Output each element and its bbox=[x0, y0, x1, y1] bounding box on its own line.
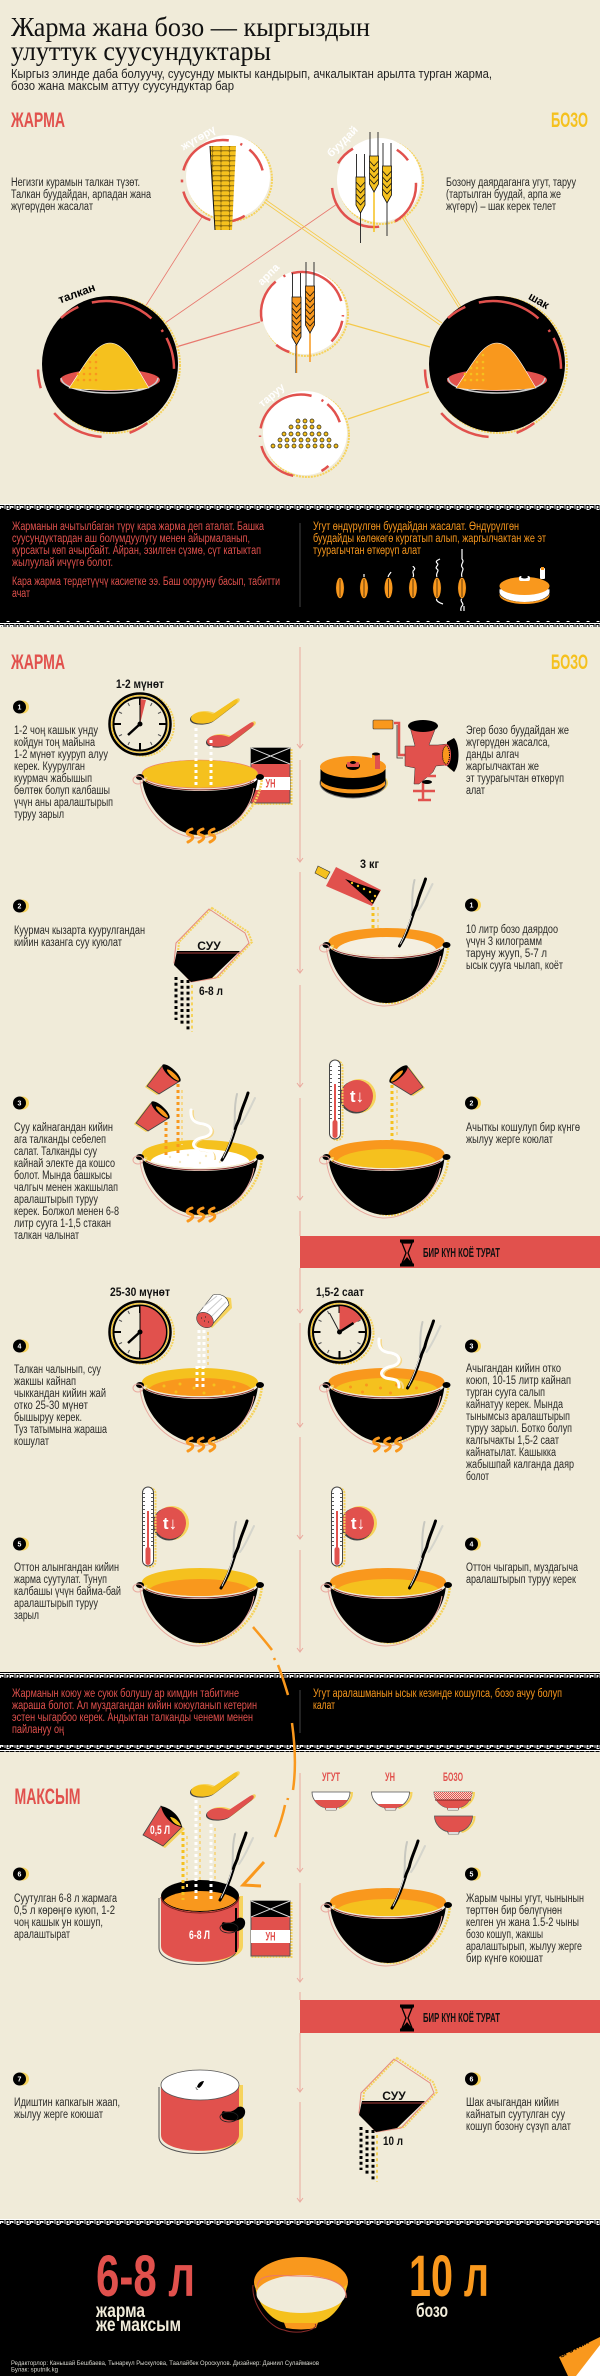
steam 2 bbox=[379, 1339, 403, 1388]
text: step 1: үчүн аны аралаштырып bbox=[14, 797, 113, 809]
icon: yeast bowl half bbox=[312, 1792, 352, 1811]
circle: barley bbox=[253, 261, 351, 373]
text: bozo grinding: жаргылчактан же bbox=[466, 761, 539, 773]
step badge 1 bbox=[13, 700, 29, 714]
icon: serving bowl bbox=[253, 2257, 348, 2332]
icon: cauldron bozo mixing bbox=[321, 1841, 452, 1966]
text: kara zharma bbox=[12, 521, 280, 600]
step badge bozo 3 bbox=[465, 1340, 481, 1352]
text: step 3: болот. Мында башкысы bbox=[14, 1170, 112, 1182]
text: step 1: 1-2 мүнөт кууруп алуу bbox=[14, 749, 108, 761]
text: bozo step 3: турган сууга салып bbox=[466, 1387, 545, 1399]
icon: meat grinder bbox=[373, 720, 458, 800]
text: kara zharma: жылуулай ичүүгө болот. bbox=[12, 557, 113, 569]
text: consistency note: пайлануу оң bbox=[12, 1724, 65, 1736]
icon: flour box maksym: УН bbox=[266, 1930, 276, 1944]
icon: tube of millet bbox=[315, 866, 381, 947]
text: бозо ingredients: жүгөрү) – шак керек телет bbox=[446, 201, 557, 213]
icon: thermometer bozo: t↓ bbox=[351, 1514, 365, 1533]
icon: flour box bbox=[251, 748, 292, 804]
text: step 1: бөлтөк болуп калбашы bbox=[14, 785, 110, 797]
text: step 3 bbox=[14, 1122, 119, 1242]
text: bozo step 5: бир күнгө коюшат bbox=[466, 1953, 544, 1965]
text: step 5: аралаштырып туруу bbox=[14, 1598, 98, 1610]
icon: thermometer bozo bbox=[332, 1487, 377, 1567]
text: step 3: Суу кайнагандан кийин bbox=[14, 1122, 113, 1134]
label: shak: шак bbox=[526, 291, 551, 312]
text: bozo step 5 bbox=[466, 1893, 584, 1965]
text: bozo step 4 bbox=[466, 1562, 578, 1586]
icon: flour box maksym bbox=[251, 1901, 292, 1957]
text: step 1: керек. Куурулган bbox=[14, 761, 85, 773]
center timeline: arrows bbox=[297, 647, 303, 2202]
step badge 7: 7 bbox=[18, 2076, 22, 2084]
subtitle: Кыргыз элинде даба болуучу, суусунду мыкты кандырып, ачкалыктан арылта турган жарма, bbox=[11, 66, 492, 81]
text: bozo step 2: жылуу жерге коюлат bbox=[466, 1134, 554, 1146]
heading: maksym: МАКСЫМ bbox=[14, 1784, 80, 1809]
text: bozo step 3: кайнатылат. Кашыкка bbox=[466, 1447, 556, 1459]
circle: wheat bbox=[316, 124, 432, 243]
text: жарма ingredients: жүгөрүдөн жасалат bbox=[11, 201, 94, 213]
falling ingredient dots bbox=[183, 1800, 215, 1900]
step badge bozo 5 bbox=[465, 1868, 481, 1880]
icon: thermometer zharma bbox=[142, 1487, 189, 1567]
text: bozo grinding: эт туурагычтан өткөрүп bbox=[466, 773, 564, 785]
text: kara zharma: Жарманын ачытылбаган түрү кара жарма деп аталат. Башка bbox=[12, 521, 264, 533]
icon: cauldron step 1 bbox=[133, 760, 264, 842]
text: step 1 bbox=[14, 725, 113, 821]
text: bozo step 1: 10 литр бозо даярдоо bbox=[466, 924, 558, 936]
text: step 4 bbox=[14, 1364, 107, 1448]
icon: clock 1-2 minutes bbox=[110, 694, 174, 756]
step badge bozo 3: 3 bbox=[470, 1344, 474, 1350]
text: step 7: жылуу жерге коюшат bbox=[14, 2109, 104, 2121]
text: bozo step 3: туруу зарыл. Ботко болуп bbox=[466, 1423, 572, 1435]
text: consistency note: эстен чыгарбоо керек. Андыктан талканды ченеми менен bbox=[12, 1712, 253, 1724]
black band: notes bbox=[0, 1672, 600, 1752]
icon: yellow spoon bbox=[190, 698, 240, 725]
logo: sputnik bbox=[558, 2337, 600, 2376]
icon: hourglass bbox=[400, 1241, 414, 1265]
caption: zharma or maksym bbox=[95, 2301, 181, 2336]
text: bozo step 3: коюп, 10-15 литр кайнап bbox=[466, 1375, 571, 1387]
credits bbox=[11, 2359, 319, 2374]
step badge 5 bbox=[13, 1538, 29, 1550]
text: bozo step 1: таруну жууп, 5-7 л bbox=[466, 948, 547, 960]
heading: жарма: ЖАРМА bbox=[10, 109, 65, 132]
text: step 4: жакшы кайнап bbox=[14, 1376, 76, 1388]
icon: salt shaker bbox=[194, 1294, 232, 1388]
text: bozo grinding bbox=[466, 725, 569, 797]
icon: jug pouring water: СУУ bbox=[382, 2089, 406, 2103]
text: bozo step 1 bbox=[466, 924, 564, 972]
icon: red spoon bbox=[206, 721, 256, 748]
red banner: one day 2: БИР КҮН КОЁ ТУРАТ bbox=[423, 2010, 500, 2025]
black band: facts bbox=[0, 504, 600, 627]
icon: maksym pot bbox=[159, 1833, 253, 1964]
icon: cauldron cooling bozo bbox=[321, 1521, 452, 1646]
text: bozo step 2 bbox=[466, 1122, 580, 1146]
text: bozo grinding: данды алгач bbox=[466, 749, 519, 761]
credits: Редакторлор: Канышай Бешбаева, Тынаркүл Рыскулова, Таалайбек Ороскулов. Дизайнер: Даниил Сулайманов bbox=[11, 2359, 319, 2367]
icon: millstone white bbox=[500, 567, 550, 604]
text: step 5: калбашы үчүн байма-бай bbox=[14, 1586, 121, 1598]
icon: hourglass 2 bbox=[400, 2006, 414, 2030]
text: bozo step 3 bbox=[466, 1363, 574, 1483]
circle: millet bbox=[254, 381, 349, 483]
step badge 3: 3 bbox=[18, 1100, 22, 1108]
icon: cup 0.5 l: 0,5 Л bbox=[150, 1823, 170, 1837]
text: ugut bbox=[313, 521, 547, 557]
text: bozo step 6 bbox=[466, 2097, 572, 2133]
text: step 5: жарма суутулат. Тунуп bbox=[14, 1574, 107, 1586]
icon: cauldron cooling zharma bbox=[133, 1521, 264, 1646]
text: step 4: кошулат bbox=[14, 1436, 50, 1448]
label: pot volume: 6-8 Л bbox=[189, 1928, 210, 1942]
text: kara zharma: Кара жарма тердетүүчү касиетке ээ. Баш оорууну басып, табитти bbox=[12, 576, 280, 588]
icon: sprouting grains bbox=[336, 549, 466, 611]
text: step 3: чалгыч менен жакшылап bbox=[14, 1182, 118, 1194]
step badge bozo 4 bbox=[465, 1538, 481, 1550]
icon: flour box: УН bbox=[266, 776, 276, 790]
icon: water jug bbox=[174, 908, 252, 1032]
text: step 1: 1-2 чоң кашык унду bbox=[14, 725, 98, 737]
label: 1-2 minutes: 1-2 мүнөт bbox=[116, 677, 164, 691]
text: yeast note: калат bbox=[313, 1700, 336, 1712]
label: wheat: буудай bbox=[325, 124, 361, 160]
text: step 2: кийин казанга суу куюлат bbox=[14, 937, 123, 949]
result: 10 l: 10 л bbox=[409, 2244, 489, 2309]
text: bozo step 3: тынымсыз аралаштырып bbox=[466, 1411, 570, 1423]
circle: corn bbox=[173, 123, 273, 231]
label: barley: арпа bbox=[256, 261, 283, 288]
circle: shak grain bbox=[397, 273, 589, 465]
red banner: one day: БИР КҮН КОЁ ТУРАТ bbox=[423, 1245, 500, 1260]
icon: covered pot bbox=[159, 2070, 245, 2154]
text: step 3: литр сууга 1-1,5 стакан bbox=[14, 1218, 111, 1230]
icon: yellow spoon maksym bbox=[190, 1771, 240, 1798]
text: consistency note bbox=[12, 1688, 257, 1736]
text: жарма ingredients: Талкан буудайдан, арпадан жана bbox=[11, 189, 151, 201]
label: talkan: талкан bbox=[57, 282, 97, 306]
text: bozo grinding: жүгөрүдөн жасалса, bbox=[466, 737, 550, 749]
text: ugut: туурагычтан өткөрүп алат bbox=[313, 545, 422, 557]
circle: talkan flour bbox=[10, 273, 202, 465]
icon: cauldron with millet water bbox=[320, 879, 450, 1006]
ratio labels: УН bbox=[385, 1772, 395, 1784]
icon: clock 25-30 minutes bbox=[110, 1302, 174, 1364]
step badge bozo 4: 4 bbox=[470, 1542, 474, 1548]
step badge 1: 1 bbox=[18, 704, 22, 712]
text: бозо ingredients bbox=[446, 177, 576, 213]
subtitle: бозо жана максым аттуу суусундуктар бар bbox=[11, 78, 234, 93]
label: 3 kg: 3 кг bbox=[360, 857, 379, 871]
icon: cup 0.5 l bbox=[143, 1806, 185, 1848]
text: consistency note: жараша болот. Ал муздагандан кийин коюуланып кетерин bbox=[12, 1700, 257, 1712]
icon: cauldron fermenting bbox=[320, 1140, 450, 1218]
step badge bozo 6: 6 bbox=[470, 2076, 474, 2084]
step badge 4 bbox=[13, 1340, 29, 1352]
title: улуттук суусундуктары bbox=[11, 36, 271, 66]
step badge bozo 2: 2 bbox=[470, 1100, 474, 1108]
icon: thermometer and temperature badge: t↓ bbox=[350, 1087, 364, 1106]
text: bozo grinding: Эгер бозо буудайдан же bbox=[466, 725, 569, 737]
red banner: one day 2 bbox=[300, 2000, 600, 2033]
step badge 4: 4 bbox=[18, 1344, 22, 1350]
step badge 5: 5 bbox=[18, 1542, 22, 1548]
title bbox=[11, 12, 370, 66]
icon: red spoon maksym bbox=[206, 1794, 256, 1821]
text: step 4: бышыруу керек. bbox=[14, 1412, 82, 1424]
ratio labels: БОЗО bbox=[443, 1772, 463, 1784]
text: bozo step 6: кошуп бозону сүзүп алат bbox=[466, 2121, 572, 2133]
text: step 5: Оттон алынгандан кийин bbox=[14, 1562, 119, 1574]
credits: Булак: sputnik.kg bbox=[11, 2366, 58, 2374]
step badge 6: 6 bbox=[18, 1872, 22, 1878]
text: step 3: талкан чалынат bbox=[14, 1230, 80, 1242]
text: bozo step 6: кайнатып суутулган суу bbox=[466, 2109, 565, 2121]
step badge bozo 2 bbox=[465, 1096, 481, 1110]
text: bozo step 1: үчүн 3 килограмм bbox=[466, 936, 542, 948]
text: step 6: чоң кашык ун кошуп, bbox=[14, 1917, 103, 1929]
text: step 4: Туз татымына жараша bbox=[14, 1424, 107, 1436]
text: kara zharma: ачат bbox=[12, 588, 31, 600]
label: millet: таруу bbox=[257, 381, 288, 410]
icon: thermometer zharma: t↓ bbox=[163, 1514, 177, 1533]
dashed arrow to maksym pot bbox=[243, 1627, 295, 1886]
step badge 6 bbox=[13, 1868, 29, 1880]
text: step 5: зарыл bbox=[14, 1610, 39, 1622]
title: Жарма жана бозо — кыргыздын bbox=[11, 12, 370, 42]
label: 6-8 l: 6-8 л bbox=[199, 984, 223, 998]
caption: zharma or maksym: же максым bbox=[95, 2315, 181, 2336]
icon: millstone bbox=[320, 752, 388, 798]
text: step 1: койдун тоң майына bbox=[14, 737, 95, 749]
text: жарма ingredients bbox=[11, 177, 151, 213]
text: step 6: Суутулган 6-8 л жармага bbox=[14, 1893, 117, 1905]
falling flour dots bbox=[196, 728, 211, 785]
step badge bozo 1: 1 bbox=[470, 902, 474, 910]
step badge bozo 5: 5 bbox=[470, 1872, 474, 1878]
text: step 4: чыккандан кийин жай bbox=[14, 1388, 106, 1400]
caption: zharma or maksym: жарма bbox=[95, 2301, 145, 2322]
text: bozo step 3: болот bbox=[466, 1471, 490, 1483]
label: corn: жүгөрү bbox=[178, 123, 219, 154]
text: step 6: 0,5 л көрөңгө куюп, 1-2 bbox=[14, 1905, 115, 1917]
text: step 3: кайнай электе да кошсо bbox=[14, 1158, 115, 1170]
text: step 3: салат. Талканды суу bbox=[14, 1146, 97, 1158]
text: bozo step 3: калгычакты 1,5-2 саат bbox=[466, 1435, 560, 1447]
text: bozo step 5: төрттөн бир бөлүгүнөн bbox=[466, 1905, 562, 1917]
icon: red cups pouring flour bbox=[134, 1062, 183, 1155]
text: step 5 bbox=[14, 1562, 121, 1622]
step badge 2: 2 bbox=[18, 904, 22, 910]
ratio labels bbox=[322, 1772, 463, 1784]
text: step 6 bbox=[14, 1893, 117, 1941]
icon: clock 1.5-2 hours bbox=[309, 1302, 374, 1364]
steam bbox=[191, 1110, 215, 1159]
text: ugut: Угут өндүрүлгөн буудайдан жасалат. Өндүрүлгөн bbox=[313, 521, 519, 533]
red banner: one day bbox=[300, 1236, 600, 1268]
icon: jug pouring water bbox=[359, 2058, 437, 2182]
text: step 3: керек. Болжол менен 6-8 bbox=[14, 1206, 119, 1218]
icon: thermometer and temperature badge bbox=[330, 1060, 376, 1140]
icon: cauldron with boiling water bbox=[133, 1093, 264, 1221]
text: step 1: куурмач жабышып bbox=[14, 773, 92, 785]
step badge 3 bbox=[13, 1096, 29, 1110]
falling salt dots bbox=[197, 1366, 203, 1388]
step badge bozo 6 bbox=[465, 2072, 481, 2086]
step badge 7 bbox=[13, 2072, 29, 2086]
step badge 2 bbox=[13, 900, 29, 912]
ratio labels: УГУТ bbox=[322, 1772, 340, 1784]
text: bozo step 5: бозо кошуп, жакшы bbox=[466, 1929, 543, 1941]
text: step 7: Идиштин капкагын жаап, bbox=[14, 2097, 120, 2109]
bottom black panel bbox=[0, 2219, 600, 2376]
label: 25-30 minutes: 25-30 мүнөт bbox=[110, 1285, 170, 1299]
text: bozo step 6: Шак ачыгандан кийин bbox=[466, 2097, 559, 2109]
text: бозо ingredients: (тартылган буудай, арпа же bbox=[446, 189, 561, 201]
text: bozo grinding: алат bbox=[466, 785, 486, 797]
text: step 3: аралаштырып туруу bbox=[14, 1194, 98, 1206]
text: step 2: Куурмач кызарта куурулгандан bbox=[14, 925, 145, 937]
text: step 1: туруу зарыл bbox=[14, 809, 64, 821]
text: consistency note: Жарманын коюу же суюк болушу ар кимдин табитине bbox=[12, 1688, 239, 1700]
text: kara zharma: курсакты көп ачырбайт. Айран, эзилген сүзмө, сүт катыктап bbox=[12, 545, 261, 557]
subtitle bbox=[11, 66, 492, 93]
text: bozo step 1: ысык сууга чылап, коёт bbox=[466, 960, 564, 972]
text: step 4: Талкан чалынып, суу bbox=[14, 1364, 101, 1376]
result: 6-8 l: 6-8 л bbox=[96, 2244, 195, 2309]
logo: sputnik: SPUTNIK bbox=[558, 2337, 591, 2360]
text: step 4: отко 25-30 мүнөт bbox=[14, 1400, 89, 1412]
connector lines between ingredients bbox=[145, 200, 461, 419]
icon: cauldron cooking bbox=[133, 1368, 264, 1451]
step badge bozo 1 bbox=[465, 898, 481, 912]
caption: bozo: бозо bbox=[416, 2301, 448, 2322]
icon: flour bowl quarter bbox=[372, 1792, 412, 1811]
text: bozo step 3: кайнатуу керек. Мында bbox=[466, 1399, 563, 1411]
icon: bozo bowl hatched bbox=[434, 1792, 474, 1811]
icon: cup pouring yeast bbox=[387, 1063, 425, 1147]
text: жарма ingredients: Негизги курамын талкан түзөт. bbox=[11, 177, 140, 189]
heading: жарма steps: ЖАРМА bbox=[10, 651, 65, 674]
text: step 7 bbox=[14, 2097, 120, 2121]
icon: cauldron boiling bozo bbox=[320, 1321, 450, 1451]
icon: water jug: СУУ bbox=[197, 939, 221, 953]
text: bozo step 3: Ачыгандан кийин отко bbox=[466, 1363, 561, 1375]
text: step 2 bbox=[14, 925, 145, 949]
text: step 3: ага талканды себелеп bbox=[14, 1134, 106, 1146]
label: 1.5-2 hours: 1,5-2 саат bbox=[316, 1285, 364, 1299]
icon: bozo bowl full bbox=[434, 1816, 474, 1834]
text: yeast note bbox=[313, 1688, 562, 1712]
text: kara zharma: суусундуктардан аш болумдуулугу менен айырмаланып, bbox=[12, 533, 250, 545]
text: bozo step 3: жабышпай калганда даяр bbox=[466, 1459, 574, 1471]
label: 10 l: 10 л bbox=[383, 2134, 403, 2148]
text: ugut: буудайды көлөкөгө кургатып алып, жаргылчактан же эт bbox=[313, 533, 547, 545]
text: step 6: аралаштырат bbox=[14, 1929, 71, 1941]
